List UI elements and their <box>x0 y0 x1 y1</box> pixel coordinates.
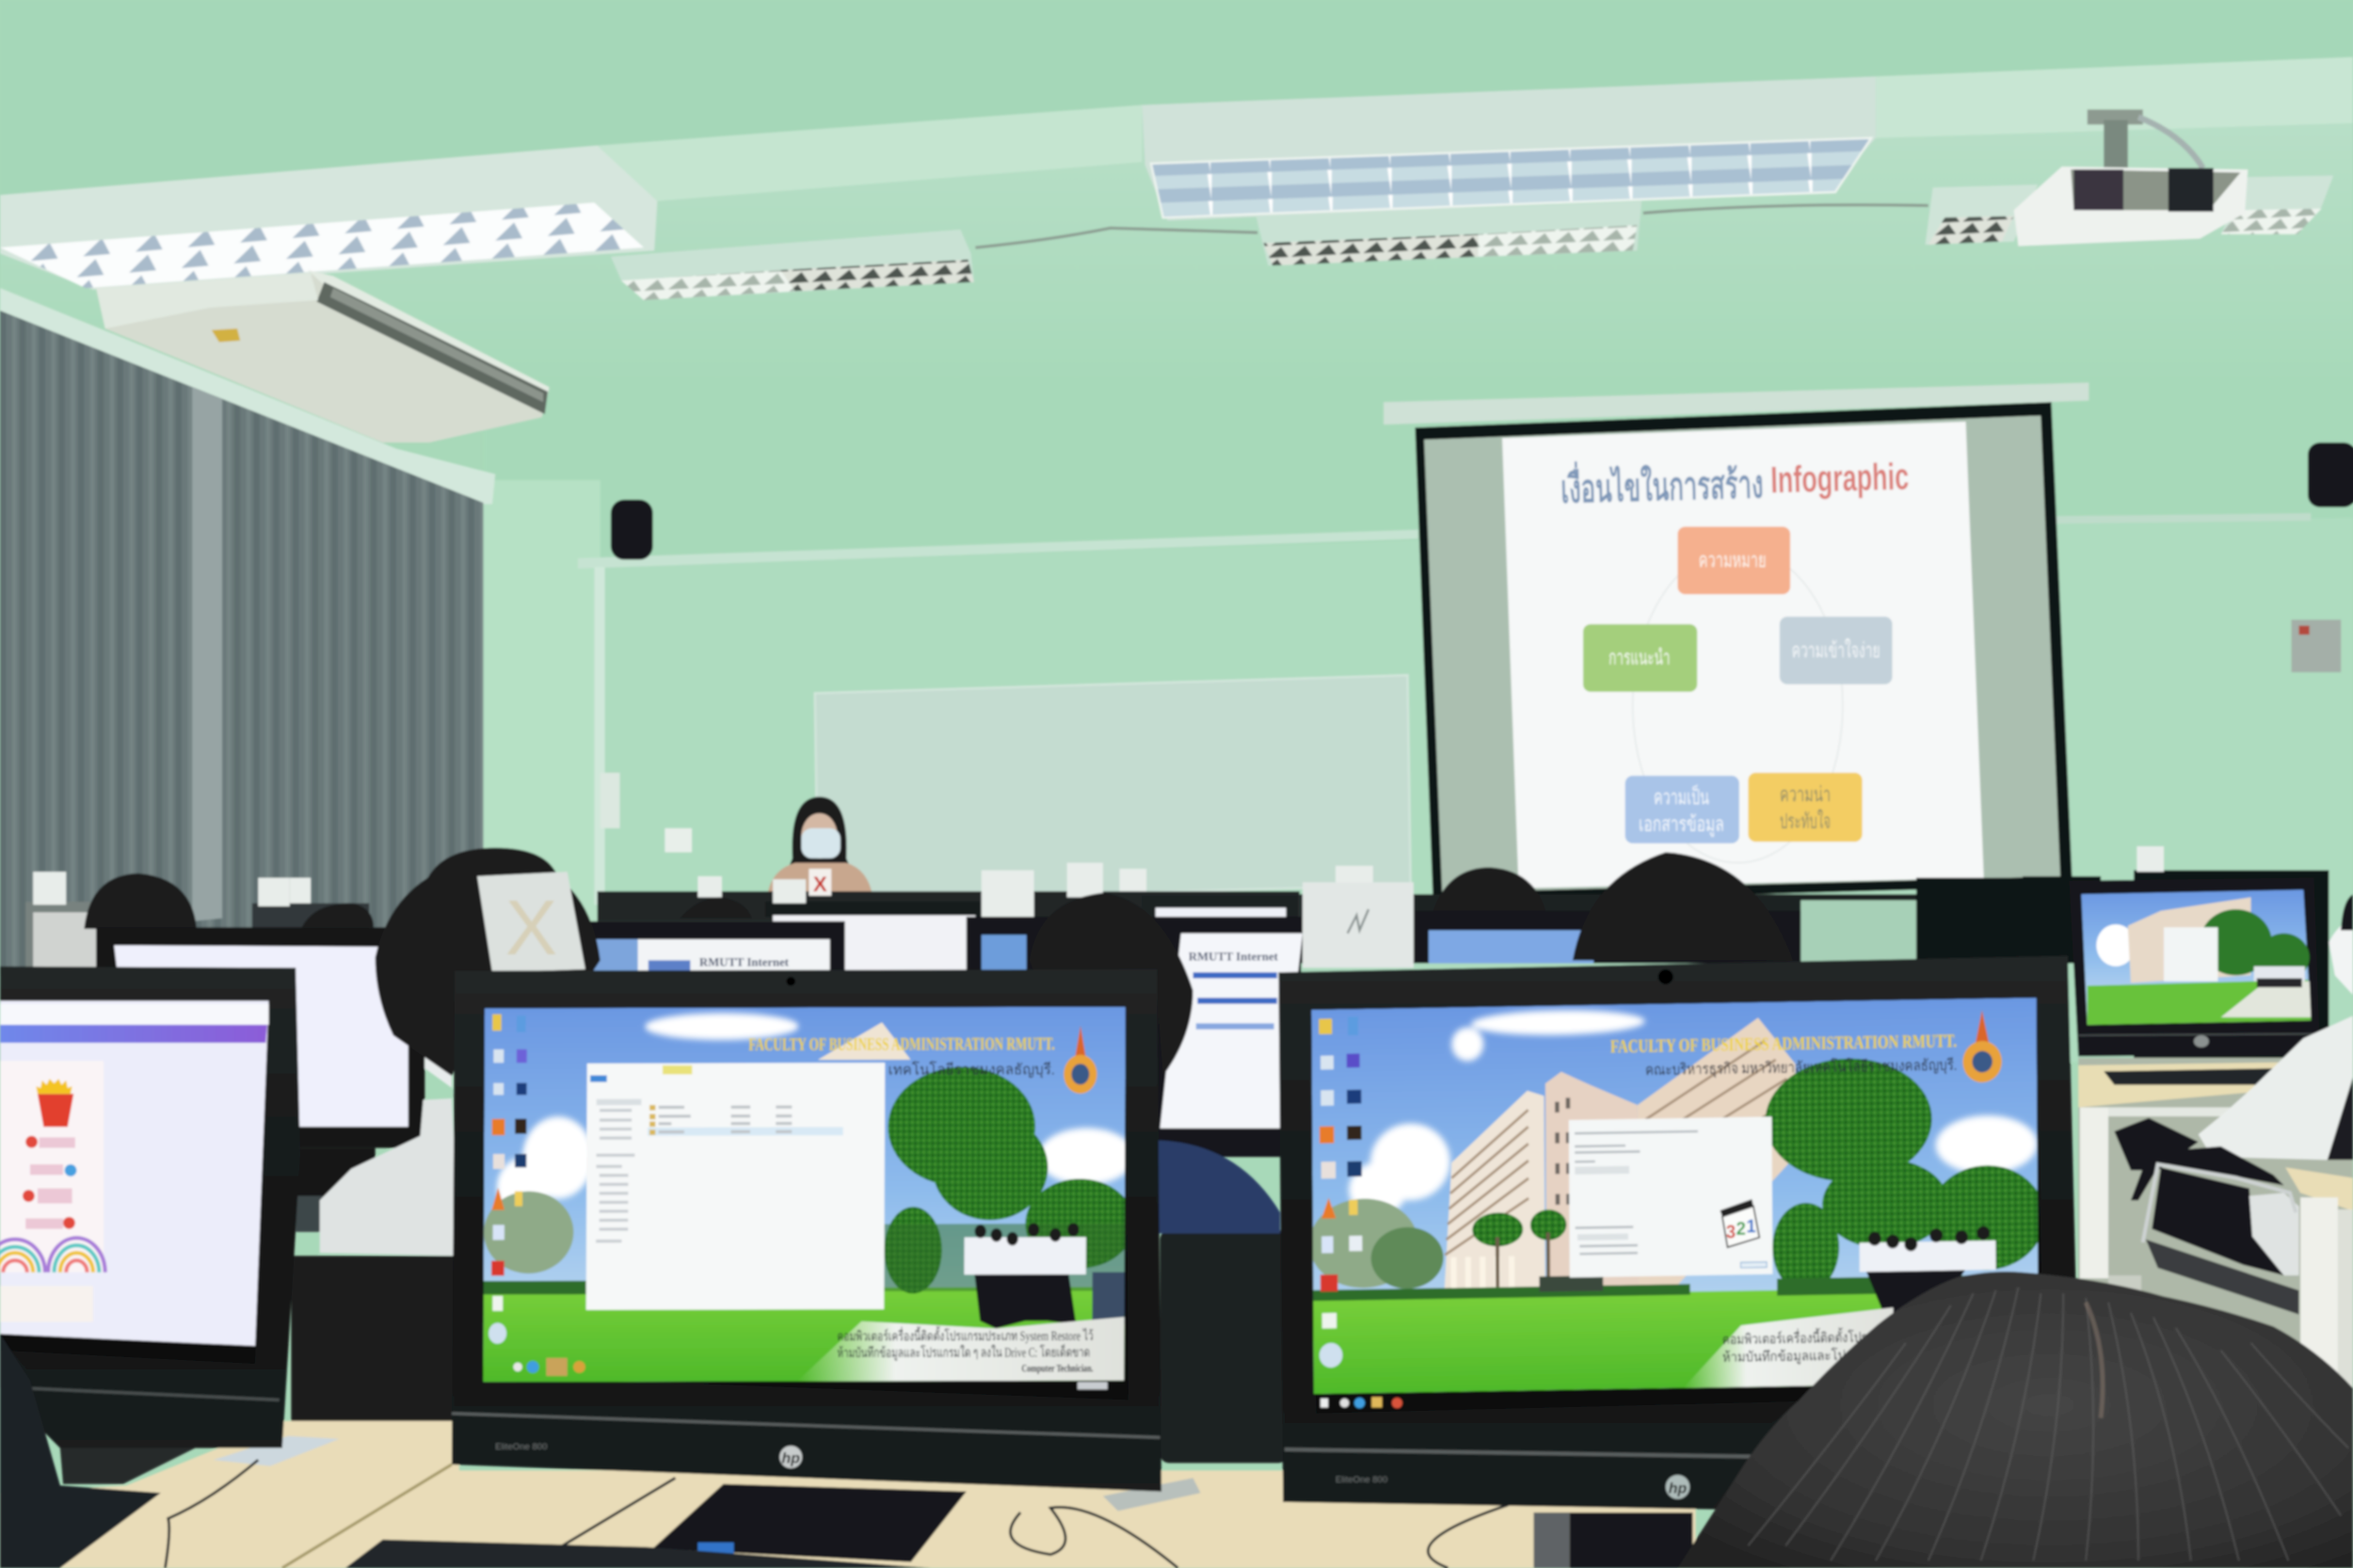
ceiling light right <box>1926 176 2333 245</box>
taskbar icons centre <box>513 1358 1108 1389</box>
mid row monitor left <box>96 927 452 1232</box>
box: documentary <box>1625 776 1739 843</box>
yellow wallpaper heading: FACULTY OF BUSINESS ADMINISTRATION RMUTT. <box>1610 1032 1957 1057</box>
slide title: Infographic <box>1770 456 1910 501</box>
slide title: เงื่อนไขในการสร้าง <box>1561 456 1764 511</box>
small desktop <box>2081 889 2311 1025</box>
wall control box <box>2292 619 2341 672</box>
restore notice text: Computer Technician. <box>1021 1364 1094 1375</box>
student group <box>964 1223 1125 1329</box>
connecting circle <box>1633 548 1843 863</box>
desk grommet plate centre <box>1103 1478 1201 1511</box>
student arm and keyboard bottom left <box>0 1334 161 1568</box>
restore notice text <box>837 1326 1094 1375</box>
monitor model label: EliteOne 800 <box>1336 1475 1387 1485</box>
right desk and background <box>2078 1058 2353 1426</box>
design canvas <box>0 1061 105 1322</box>
front monitor right <box>1278 956 2081 1515</box>
update dialog <box>1569 1116 1772 1277</box>
wall outlet and thermostat <box>600 773 692 853</box>
projected slide <box>1502 422 1984 888</box>
projection screen <box>1384 383 2089 904</box>
rear heads <box>84 867 1545 929</box>
restore notice text: คอมพิวเตอร์เครื่องนี้ติดตั้งโปร <box>1722 1327 1867 1348</box>
desks foreground <box>0 1421 1696 1568</box>
palm trees and low trees <box>1309 1195 1567 1290</box>
sign board <box>1539 1275 1603 1292</box>
box: impressive: ประทับใจ <box>1780 809 1831 833</box>
university building <box>1443 1017 1797 1291</box>
rainbows <box>0 1238 105 1272</box>
hp logo <box>779 1446 802 1468</box>
cables <box>165 1460 1508 1568</box>
fries icon <box>36 1079 73 1127</box>
mid row monitor centre left: RMUTT Internet <box>699 956 790 969</box>
window with grey vertical blinds <box>0 288 495 975</box>
presenter name card with red cross <box>808 869 831 896</box>
yellow wallpaper heading: FACULTY OF BUSINESS ADMINISTRATION RMUTT. <box>748 1033 1055 1054</box>
stand left <box>60 1448 195 1484</box>
taskbar icons right <box>1321 1397 1402 1408</box>
box: guidance <box>1583 624 1697 692</box>
thai wallpaper heading: คณะบริหารธุรกิจ มหาวิทยาลัยเทคโนโลยีราชมงคลธัญบุรี. <box>1645 1055 1957 1080</box>
university logo <box>1962 1010 2002 1082</box>
media player 321 icon: 3 <box>1726 1223 1736 1243</box>
app toolbar <box>0 1025 267 1043</box>
student navy shirt <box>1159 1141 1280 1233</box>
student head foreground right <box>1677 1272 2353 1568</box>
restore notice text: คอมพิวเตอร์เครื่องนี้ติดตั้งโปรแกรมประเภท System Restore ไว้ <box>837 1326 1094 1344</box>
chair between front monitors left <box>291 1256 459 1424</box>
box: meaning <box>1677 527 1790 594</box>
mid row monitor centre right <box>967 917 1303 1157</box>
ceiling light centre <box>1142 76 1876 220</box>
whiteboard <box>815 675 1411 901</box>
thai wallpaper heading: เทคโนโลยีราชมงคลธัญบุรี. <box>888 1060 1055 1079</box>
ceiling light left <box>0 146 657 290</box>
speaker left <box>611 500 653 560</box>
media player 321 icon: 1 <box>1746 1217 1756 1238</box>
chair between front monitors right <box>1160 1230 1288 1463</box>
keyboard centre <box>345 1540 931 1568</box>
monitor stand right <box>1533 1512 1692 1568</box>
front monitor left <box>0 967 300 1484</box>
ceiling light small middle <box>1256 201 1641 265</box>
name card with cross: X <box>505 884 557 971</box>
hp logo: hp <box>1669 1480 1687 1496</box>
media player 321 icon <box>1720 1199 1759 1247</box>
ceiling <box>0 0 2353 391</box>
right foreground desk <box>2285 1167 2353 1404</box>
student group <box>1859 1226 1996 1320</box>
desktop icons <box>1318 1016 1363 1368</box>
browser bar <box>0 1004 268 1025</box>
list rows <box>23 1136 76 1229</box>
restore notice text: ห้ามบันทึกข้อมูลและโปรแ <box>1722 1347 1860 1366</box>
box: documentary: ความเป็น <box>1654 784 1709 809</box>
student head curly right <box>1573 853 1793 960</box>
desktop wallpaper centre <box>483 1007 1135 1382</box>
name card with cross <box>477 872 585 972</box>
air conditioner <box>96 270 550 442</box>
box: impressive <box>1748 773 1863 841</box>
student head centre <box>1030 893 1193 1076</box>
box: guidance: การแนะนำ <box>1609 646 1671 669</box>
mid row monitor centre left <box>588 921 845 972</box>
box: meaning: ความหมาย <box>1699 549 1767 572</box>
ceiling light small left <box>611 230 974 300</box>
paper name cards <box>33 846 2164 929</box>
presenter name card with red cross: X <box>813 872 827 896</box>
monitor stand centre <box>653 1484 967 1562</box>
box: easy to understand: ความเข้าใจง่าย <box>1792 638 1881 662</box>
hp logo: hp <box>782 1450 800 1466</box>
desk grommet plate <box>213 1436 339 1466</box>
university logo <box>1064 1026 1097 1094</box>
rear row of monitors <box>25 871 2329 1058</box>
hp logo <box>1666 1475 1689 1499</box>
restore notice text <box>1722 1327 1867 1366</box>
desktop screen <box>0 1000 268 1346</box>
media player 321 icon: 2 <box>1737 1219 1746 1240</box>
wall <box>483 387 2353 1063</box>
file explorer window <box>586 1063 885 1310</box>
monitor model label: EliteOne 800 <box>495 1442 547 1452</box>
name card with scribble <box>1303 882 1414 968</box>
speaker right <box>2308 442 2353 507</box>
restore notice text: ห้ามบันทึกข้อมูลและโปรแกรมใด ๆ ลงใน Drive C: โดยเด็ดขาด <box>837 1342 1090 1361</box>
box: easy to understand <box>1780 616 1892 684</box>
desktop wallpaper right <box>1308 998 2046 1394</box>
right rear monitor <box>2070 878 2320 1085</box>
mid row monitor centre right: RMUTT Internet <box>1189 950 1279 963</box>
mid row monitor right <box>1415 911 1801 964</box>
front monitor centre <box>452 969 1161 1492</box>
student white shirt <box>320 1098 459 1256</box>
box: documentary: เอกสารข้อมูล <box>1639 812 1724 837</box>
projector <box>2014 109 2248 246</box>
student right side with white shirt and chair <box>2114 894 2353 1315</box>
student head large left <box>376 848 600 1076</box>
box: impressive: ความน่า <box>1780 782 1831 806</box>
desktop icons <box>488 1015 527 1344</box>
presenter <box>767 797 873 902</box>
